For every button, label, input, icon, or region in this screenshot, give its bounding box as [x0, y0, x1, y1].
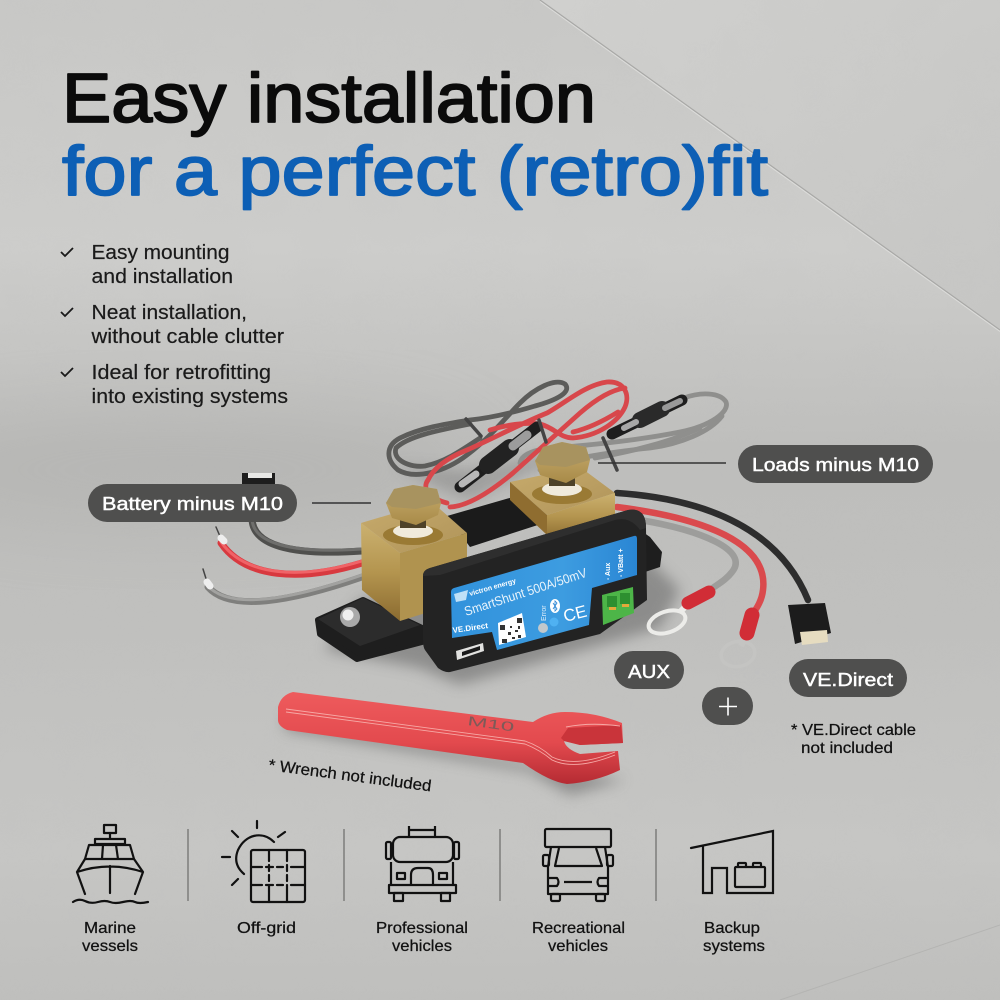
icon: ship	[73, 825, 148, 903]
device shadows	[285, 420, 680, 795]
icon: professional vehicle	[386, 826, 459, 901]
right brass block	[510, 467, 615, 540]
cable ties	[466, 419, 617, 470]
label: recreational vehicles	[532, 920, 625, 955]
shunt case	[423, 510, 647, 672]
callout: plus	[702, 687, 753, 725]
check item 1: Easy mounting	[92, 241, 230, 264]
label: backup systems: systems	[703, 938, 765, 955]
label: recreational vehicles: Recreational	[532, 920, 625, 937]
check item 2	[61, 301, 284, 348]
callout: battery minus	[88, 484, 371, 522]
title	[62, 59, 768, 210]
check item 3	[61, 361, 288, 408]
error label: Error	[541, 605, 548, 621]
footnote: VE.Direct cable	[791, 722, 916, 757]
wrench jaw inner wall	[561, 725, 623, 745]
grey wire left	[208, 575, 362, 601]
label: professional vehicles: Professional	[376, 920, 468, 937]
black shunt bar	[447, 497, 544, 547]
callout: VE.Direct: VE.Direct	[803, 669, 893, 690]
VE.Direct port	[456, 643, 484, 660]
right cables	[617, 493, 808, 615]
check item 1	[61, 241, 233, 288]
VE.Direct plug top left	[242, 473, 275, 487]
check item 3: into existing systems	[92, 385, 288, 408]
footnote: wrench: * Wrench not included	[267, 757, 432, 795]
feature checklist	[61, 241, 288, 408]
divider lines	[188, 829, 656, 901]
label: marine vessels	[82, 920, 138, 955]
label: backup systems: Backup	[704, 920, 760, 937]
label: backup systems	[703, 920, 765, 955]
callout: AUX: AUX	[628, 661, 670, 682]
footnote: VE.Direct cable: not included	[801, 740, 893, 757]
grey cable	[640, 520, 736, 590]
brand mark: victron energy	[469, 578, 517, 598]
model name: SmartShunt 500A/50mV	[462, 565, 589, 619]
bluetooth badge	[550, 599, 560, 613]
left brass bolt	[383, 485, 443, 545]
label: recreational vehicles: vehicles	[548, 938, 608, 955]
right brass bolt	[532, 442, 592, 504]
left cables	[203, 518, 362, 601]
label: off-grid: Off-grid	[237, 920, 296, 937]
ferrules	[203, 527, 222, 585]
fuse holder left	[460, 427, 537, 487]
icon: backup building with battery	[691, 831, 773, 893]
icon: recreational vehicle	[543, 829, 613, 901]
QR code	[498, 613, 526, 645]
CE mark: CE	[561, 602, 589, 626]
top cable loom	[389, 382, 727, 507]
red M10 wrench	[278, 692, 623, 784]
red looped wire	[426, 382, 627, 507]
label: professional vehicles: vehicles	[392, 938, 452, 955]
label: marine vessels: Marine	[84, 920, 136, 937]
applications row	[73, 821, 773, 955]
fuse holder right	[612, 400, 682, 434]
dark cable	[617, 493, 808, 600]
title line 2: for a perfect (retro)fit	[62, 132, 768, 210]
grey looped wire	[520, 394, 727, 470]
terminal labels: - Aux	[605, 563, 612, 580]
right mounting tab	[640, 530, 662, 572]
blue label	[451, 536, 637, 650]
check item 1: and installation	[92, 265, 233, 288]
wrench size marking: M10	[467, 713, 515, 735]
footnote: VE.Direct cable: * VE.Direct cable	[791, 722, 916, 739]
check item 3: Ideal for retrofitting	[92, 361, 271, 384]
callout: VE.Direct	[789, 659, 907, 697]
red cable	[617, 507, 763, 615]
red wire left	[221, 542, 362, 574]
callout: loads minus: Loads minus M10	[752, 454, 919, 475]
title line 1: Easy installation	[62, 59, 596, 137]
callout: AUX	[614, 651, 684, 689]
dark wire left	[252, 518, 362, 552]
AUX ring terminal	[646, 592, 709, 638]
product photo: SmartShunt with cables	[203, 382, 831, 795]
icon: solar panel and sun	[222, 821, 305, 902]
callout: loads minus	[598, 445, 933, 483]
VE.Direct connector	[788, 603, 831, 645]
check item 2: Neat installation,	[92, 301, 247, 324]
callout: battery minus: Battery minus M10	[102, 493, 283, 514]
check item 2: without cable clutter	[90, 325, 284, 348]
label: professional vehicles	[376, 920, 468, 955]
base plate	[318, 598, 422, 659]
label: marine vessels: vessels	[82, 938, 138, 955]
VE.Direct port label: VE.Direct	[452, 621, 489, 635]
left brass block	[361, 502, 467, 621]
blue label: - VBatt +	[618, 548, 625, 577]
dark grey looped wire	[389, 382, 567, 474]
green terminal block	[602, 587, 634, 625]
status LEDs	[538, 623, 548, 633]
plus ring terminal	[719, 615, 757, 669]
